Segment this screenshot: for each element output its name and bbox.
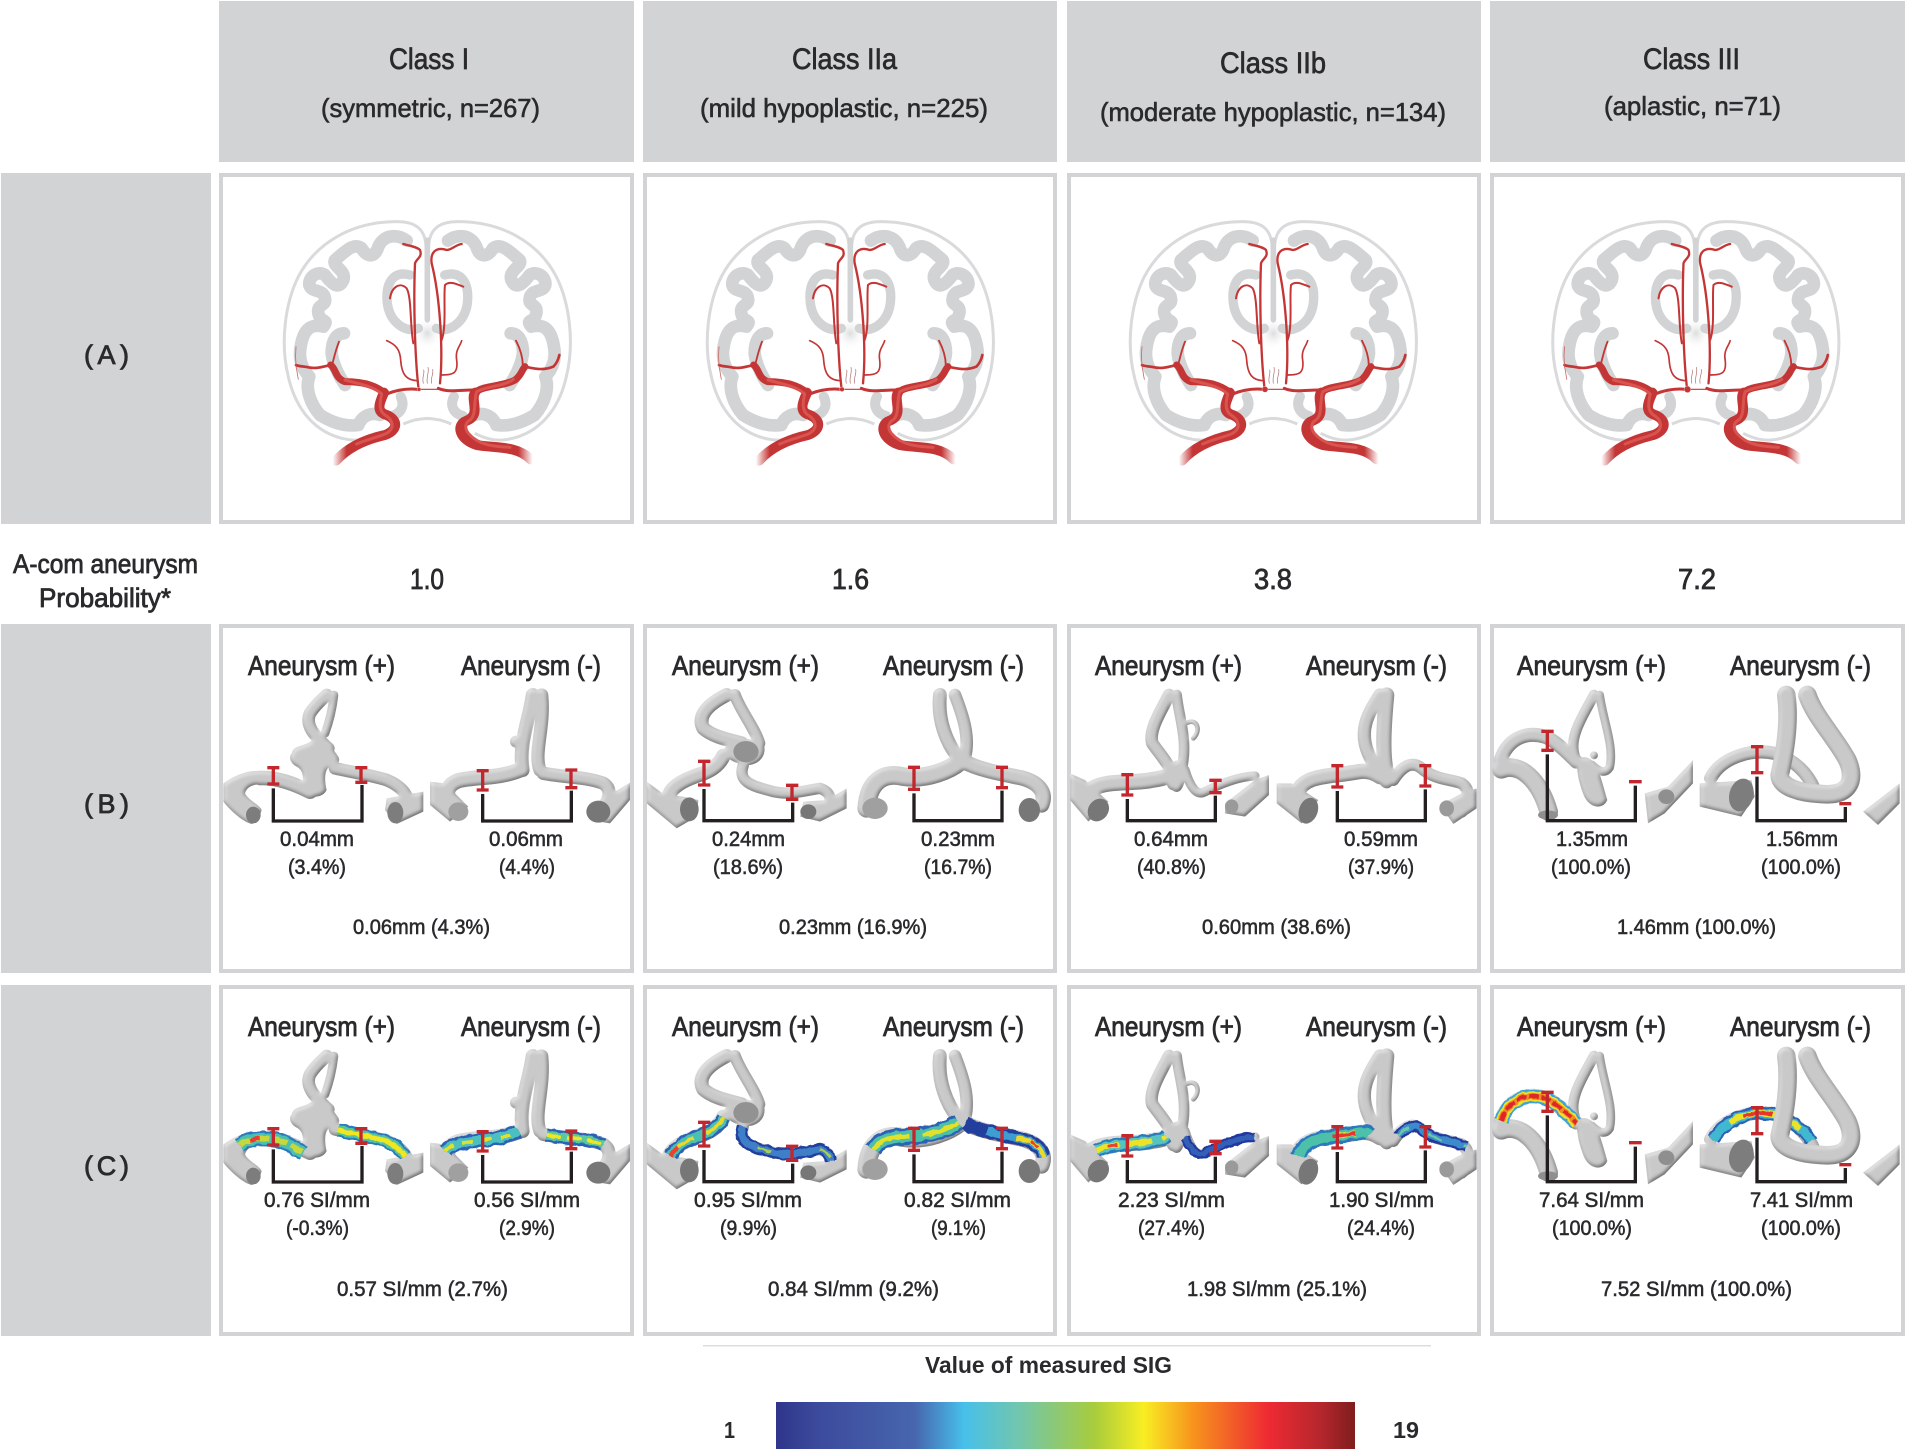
panel: C Class IIb: (27.4%)	[1138, 1217, 1205, 1240]
panel: B Class I: Aneurysm (-)	[461, 650, 601, 681]
panel: C Class IIa	[645, 987, 1055, 1334]
legend: value of measured SIG: 19	[1393, 1417, 1419, 1443]
header: Class IIb	[1067, 1, 1481, 162]
panel: C Class I: Aneurysm (-)	[461, 1011, 601, 1042]
legend: value of measured SIG: Value of measured SIG	[925, 1352, 1172, 1378]
panel: B Class I: Aneurysm (+)	[248, 650, 395, 681]
SIG maps Class IIb	[1070, 1056, 1477, 1187]
panel: C Class I: Aneurysm (+)	[248, 1011, 395, 1042]
probability value Class IIb: 3.8	[1254, 564, 1292, 596]
panel: B Class IIb: 0.60mm (38.6%)	[1202, 916, 1351, 939]
panel: C Class I	[221, 987, 632, 1334]
panel: B Class III: Aneurysm (-)	[1730, 650, 1871, 681]
panel: B Class I	[221, 626, 632, 971]
panel: C Class IIa: 0.95 SI/mm	[694, 1189, 802, 1212]
panel: B Class III: 1.35mm	[1556, 828, 1628, 851]
legend: value of measured SIG	[703, 1345, 1431, 1449]
panel: C Class I: (2.9%)	[499, 1217, 555, 1240]
panel: C Class IIa: Aneurysm (+)	[672, 1011, 819, 1042]
panel: C Class IIb: Aneurysm (+)	[1095, 1011, 1242, 1042]
row label: (C)	[1, 985, 211, 1336]
panel: brain Class IIb	[1069, 175, 1479, 522]
panel: B Class IIa: (16.7%)	[924, 856, 992, 879]
panel: B Class IIa: (18.6%)	[713, 856, 783, 879]
vessel models Class I	[223, 695, 630, 824]
header: Class III: (aplastic, n=71)	[1604, 91, 1781, 121]
panel: brain Class I	[221, 175, 632, 522]
SIG maps Class I	[223, 1056, 630, 1185]
panel: C Class IIb: Aneurysm (-)	[1306, 1011, 1447, 1042]
panel: B Class IIb: Aneurysm (-)	[1306, 650, 1447, 681]
panel: B Class IIa: 0.23mm	[921, 828, 995, 851]
panel: brain Class III	[1492, 175, 1903, 522]
panel: B Class IIb: 0.64mm	[1134, 828, 1208, 851]
panel: B Class IIb: Aneurysm (+)	[1095, 650, 1242, 681]
panel: B Class III: Aneurysm (+)	[1517, 650, 1666, 681]
panel: B Class IIa: 0.23mm (16.9%)	[779, 916, 927, 939]
panel: C Class III	[1492, 987, 1903, 1334]
panel: B Class III: (100.0%)	[1761, 856, 1841, 879]
panel: C Class I: 0.76 SI/mm	[264, 1189, 370, 1212]
legend: value of measured SIG: 1	[724, 1417, 735, 1443]
probability value Class IIa: 1.6	[832, 564, 869, 596]
panel: C Class IIb: 1.98 SI/mm (25.1%)	[1187, 1278, 1367, 1301]
panel: B Class IIa: 0.24mm	[712, 828, 785, 851]
header: Class IIa	[643, 1, 1057, 162]
header: Class IIa: (mild hypoplastic, n=225)	[700, 93, 988, 123]
row label: (A): ( A )	[84, 340, 129, 370]
panel: C Class III: (100.0%)	[1761, 1217, 1841, 1240]
panel: B Class IIb	[1069, 626, 1479, 971]
row label: (B)	[1, 624, 211, 973]
panel: C Class III: (100.0%)	[1552, 1217, 1632, 1240]
panel: C Class III: Aneurysm (-)	[1730, 1011, 1871, 1042]
panel: C Class III: Aneurysm (+)	[1517, 1011, 1666, 1042]
panel: C Class IIb	[1069, 987, 1479, 1334]
vessel models Class III	[1501, 695, 1900, 825]
panel: C Class III: 7.52 SI/mm (100.0%)	[1601, 1278, 1792, 1301]
panel: B Class IIa	[645, 626, 1055, 971]
panel: B Class I: (4.4%)	[499, 856, 555, 879]
SIG maps Class III	[1501, 1056, 1900, 1186]
header: Class I	[219, 1, 634, 162]
panel: C Class IIa: 0.82 SI/mm	[904, 1189, 1011, 1212]
header: Class I: Class I	[389, 43, 469, 76]
label: A-com aneurysm probability	[13, 549, 198, 613]
probability value Class I: 1.0	[410, 564, 444, 596]
header: Class III: Class III	[1643, 43, 1740, 76]
panel: B Class I: 0.06mm	[489, 828, 563, 851]
panel: C Class IIb: (24.4%)	[1347, 1217, 1415, 1240]
panel: B Class III	[1492, 626, 1903, 971]
panel: C Class IIa: (9.9%)	[720, 1217, 777, 1240]
panel: C Class IIa: 0.84 SI/mm (9.2%)	[768, 1278, 939, 1301]
vessel models Class IIb	[1070, 695, 1477, 826]
colour bar	[776, 1402, 1355, 1449]
panel: C Class III: 7.41 SI/mm	[1750, 1189, 1853, 1212]
panel: C Class I: (-0.3%)	[286, 1217, 349, 1240]
panel: C Class IIa: Aneurysm (-)	[883, 1011, 1024, 1042]
panel: B Class III: 1.46mm (100.0%)	[1617, 916, 1776, 939]
row label: (C): ( C )	[84, 1151, 129, 1181]
label: A-com aneurysm probability: Probability*	[39, 583, 171, 613]
panel: B Class I: (3.4%)	[288, 856, 346, 879]
header: Class IIa: Class IIa	[792, 43, 897, 76]
probability value Class III: 7.2	[1678, 564, 1716, 596]
panel: C Class III: 7.64 SI/mm	[1539, 1189, 1644, 1212]
panel: B Class III: 1.56mm	[1766, 828, 1838, 851]
label: A-com aneurysm probability: A-com aneurysm	[13, 549, 198, 579]
panel: C Class IIb: 1.90 SI/mm	[1329, 1189, 1434, 1212]
SIG maps Class IIa	[647, 1056, 1043, 1189]
panel: B Class III: (100.0%)	[1551, 856, 1631, 879]
row label: (B): ( B )	[84, 789, 129, 819]
panel: C Class I: 0.56 SI/mm	[474, 1189, 580, 1212]
panel: B Class IIa: Aneurysm (-)	[883, 650, 1024, 681]
panel: B Class IIb: 0.59mm	[1344, 828, 1418, 851]
header: Class IIb: Class IIb	[1220, 47, 1326, 80]
panel: C Class IIb: 2.23 SI/mm	[1118, 1189, 1225, 1212]
header: Class III	[1490, 1, 1905, 162]
vessel models Class IIa	[647, 695, 1043, 828]
panel: B Class IIa: Aneurysm (+)	[672, 650, 819, 681]
row label: (A)	[1, 173, 211, 524]
panel: B Class I: 0.04mm	[280, 828, 354, 851]
panel: B Class IIb: (40.8%)	[1137, 856, 1206, 879]
panel: C Class I: 0.57 SI/mm (2.7%)	[337, 1278, 508, 1301]
panel: brain Class IIa	[645, 175, 1055, 522]
panel: B Class IIb: (37.9%)	[1348, 856, 1414, 879]
panel: C Class IIa: (9.1%)	[931, 1217, 986, 1240]
header: Class I: (symmetric, n=267)	[321, 93, 540, 123]
header: Class IIb: (moderate hypoplastic, n=134)	[1100, 97, 1446, 127]
panel: B Class I: 0.06mm (4.3%)	[353, 916, 490, 939]
